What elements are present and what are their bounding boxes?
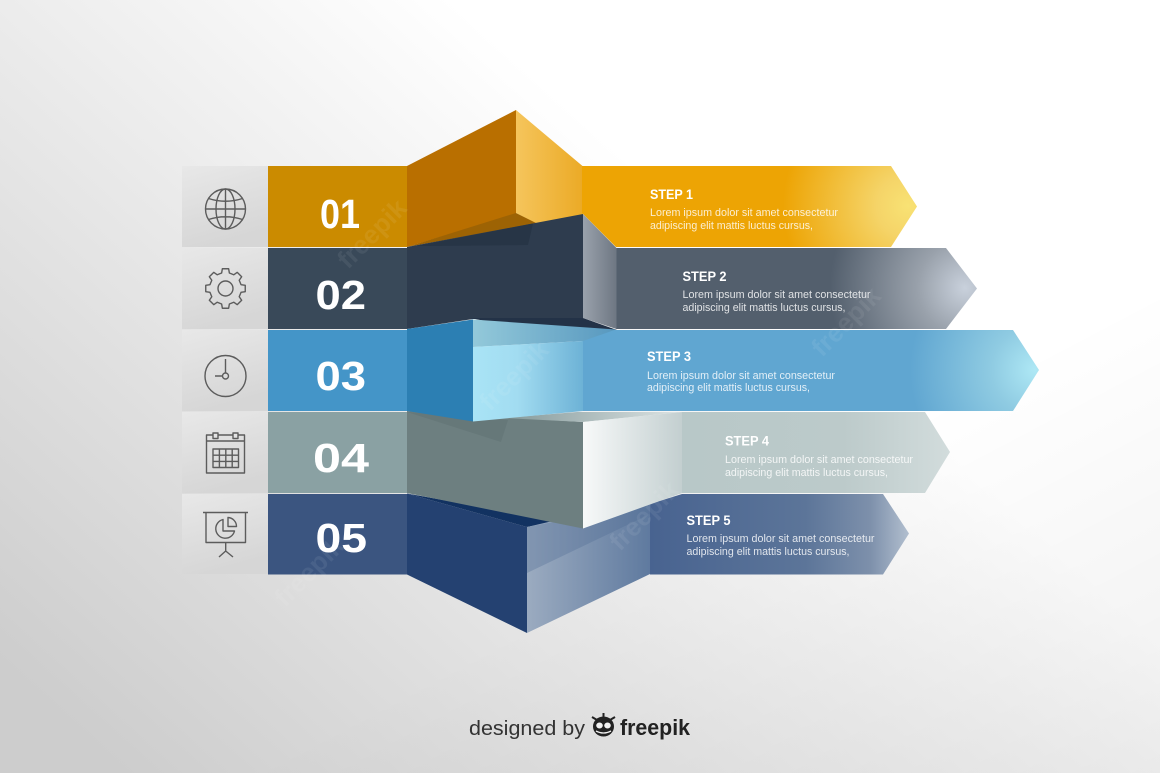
- watermarks: freepik: [805, 280, 887, 362]
- text block: step 4: Lorem ipsum dolor sit amet consectetur: [725, 454, 913, 466]
- number tile 03: [268, 330, 407, 411]
- numbers: 05: [316, 515, 367, 561]
- fold shade 05: [527, 504, 650, 573]
- fold top 05: [407, 494, 560, 527]
- footer: designed by freepik: [469, 713, 691, 740]
- ribbon 3: [582, 330, 1039, 411]
- ribbon 1: [582, 166, 917, 247]
- text block: step 4: STEP 4: [725, 434, 769, 448]
- watermarks: freepik: [473, 334, 555, 416]
- panel: step 5 ribbon and fold: [268, 494, 909, 633]
- text block: step 2: [682, 269, 871, 314]
- text block: step 4: [725, 434, 913, 479]
- number tile 02: [268, 248, 407, 329]
- panel: step 1 ribbon and fold: [268, 110, 917, 247]
- panel: step 3 ribbon and fold: [268, 320, 1039, 422]
- number tile 01: [268, 166, 407, 247]
- fold highlight 01: [516, 110, 583, 225]
- text block: step 1: [650, 187, 838, 232]
- fold side 04: [407, 411, 583, 528]
- text block: step 1: Lorem ipsum dolor sit amet consectetur: [650, 207, 838, 219]
- text block: step 1: adipiscing elit mattis luctus cursus,: [650, 220, 813, 232]
- text block: step 3: adipiscing elit mattis luctus cursus,: [647, 382, 810, 394]
- text block: step 5: adipiscing elit mattis luctus cursus,: [686, 546, 850, 558]
- icon: globe: [206, 189, 246, 229]
- text block: step 5: [686, 513, 875, 558]
- icon: clock: [205, 356, 246, 396]
- text block: step 1: STEP 1: [650, 187, 693, 202]
- fold under-shadow 02: [470, 318, 617, 330]
- fold highlight 05: [527, 504, 650, 633]
- fold side 02: [407, 214, 583, 329]
- text block: step 4: adipiscing elit mattis luctus cursus,: [725, 467, 888, 479]
- text block: step 2: Lorem ipsum dolor sit amet consectetur: [682, 289, 871, 301]
- icon: freepik logo: [592, 713, 615, 736]
- ribbon 2: [616, 248, 977, 329]
- fold highlight 04: [583, 412, 682, 528]
- text block: step 3: STEP 3: [647, 349, 691, 364]
- numbers: 01: [320, 191, 360, 237]
- fold side 05: [407, 494, 527, 633]
- fold side 01: [407, 110, 516, 247]
- fold highlight 02: [583, 214, 616, 329]
- footer text: designed by: designed by: [469, 717, 586, 740]
- icon: calendar: [206, 433, 244, 473]
- text block: step 2: STEP 2: [682, 269, 726, 284]
- text block: step 3: Lorem ipsum dolor sit amet consectetur: [647, 370, 835, 382]
- footer text: freepik: freepik: [620, 715, 691, 740]
- icon: presentation board: [203, 512, 248, 557]
- text block: step 5: STEP 5: [686, 513, 731, 528]
- number tile 04: [268, 412, 407, 493]
- fold shadow 02: [416, 224, 533, 246]
- panel: icon column: [182, 166, 268, 574]
- watermarks: freepik: [603, 474, 685, 556]
- panel: step 4 ribbon and fold: [268, 411, 950, 528]
- watermarks: [268, 192, 887, 612]
- numbers: 03: [316, 353, 366, 399]
- fold shadow 01: [407, 213, 537, 247]
- panel: step 2 ribbon and fold: [268, 214, 977, 330]
- watermarks: freepik: [331, 192, 413, 274]
- fold side 03: [407, 320, 473, 422]
- text block: step 2: adipiscing elit mattis luctus cursus,: [682, 302, 846, 314]
- number tile 05: [268, 494, 407, 574]
- numbers: [313, 191, 369, 561]
- fold highlight 03: [473, 341, 583, 422]
- fold top 03: [473, 320, 616, 347]
- numbers: 02: [316, 272, 366, 318]
- icon: gear: [206, 269, 245, 308]
- text block: step 3: [647, 349, 835, 394]
- ribbon 5: [650, 494, 909, 574]
- numbers: 04: [313, 435, 369, 481]
- text block: step 5: Lorem ipsum dolor sit amet consectetur: [686, 533, 875, 545]
- fold shadow 04: [407, 412, 508, 442]
- watermarks: freepik: [268, 530, 350, 612]
- ribbon 4: [682, 412, 950, 493]
- fold top 04: [503, 412, 682, 422]
